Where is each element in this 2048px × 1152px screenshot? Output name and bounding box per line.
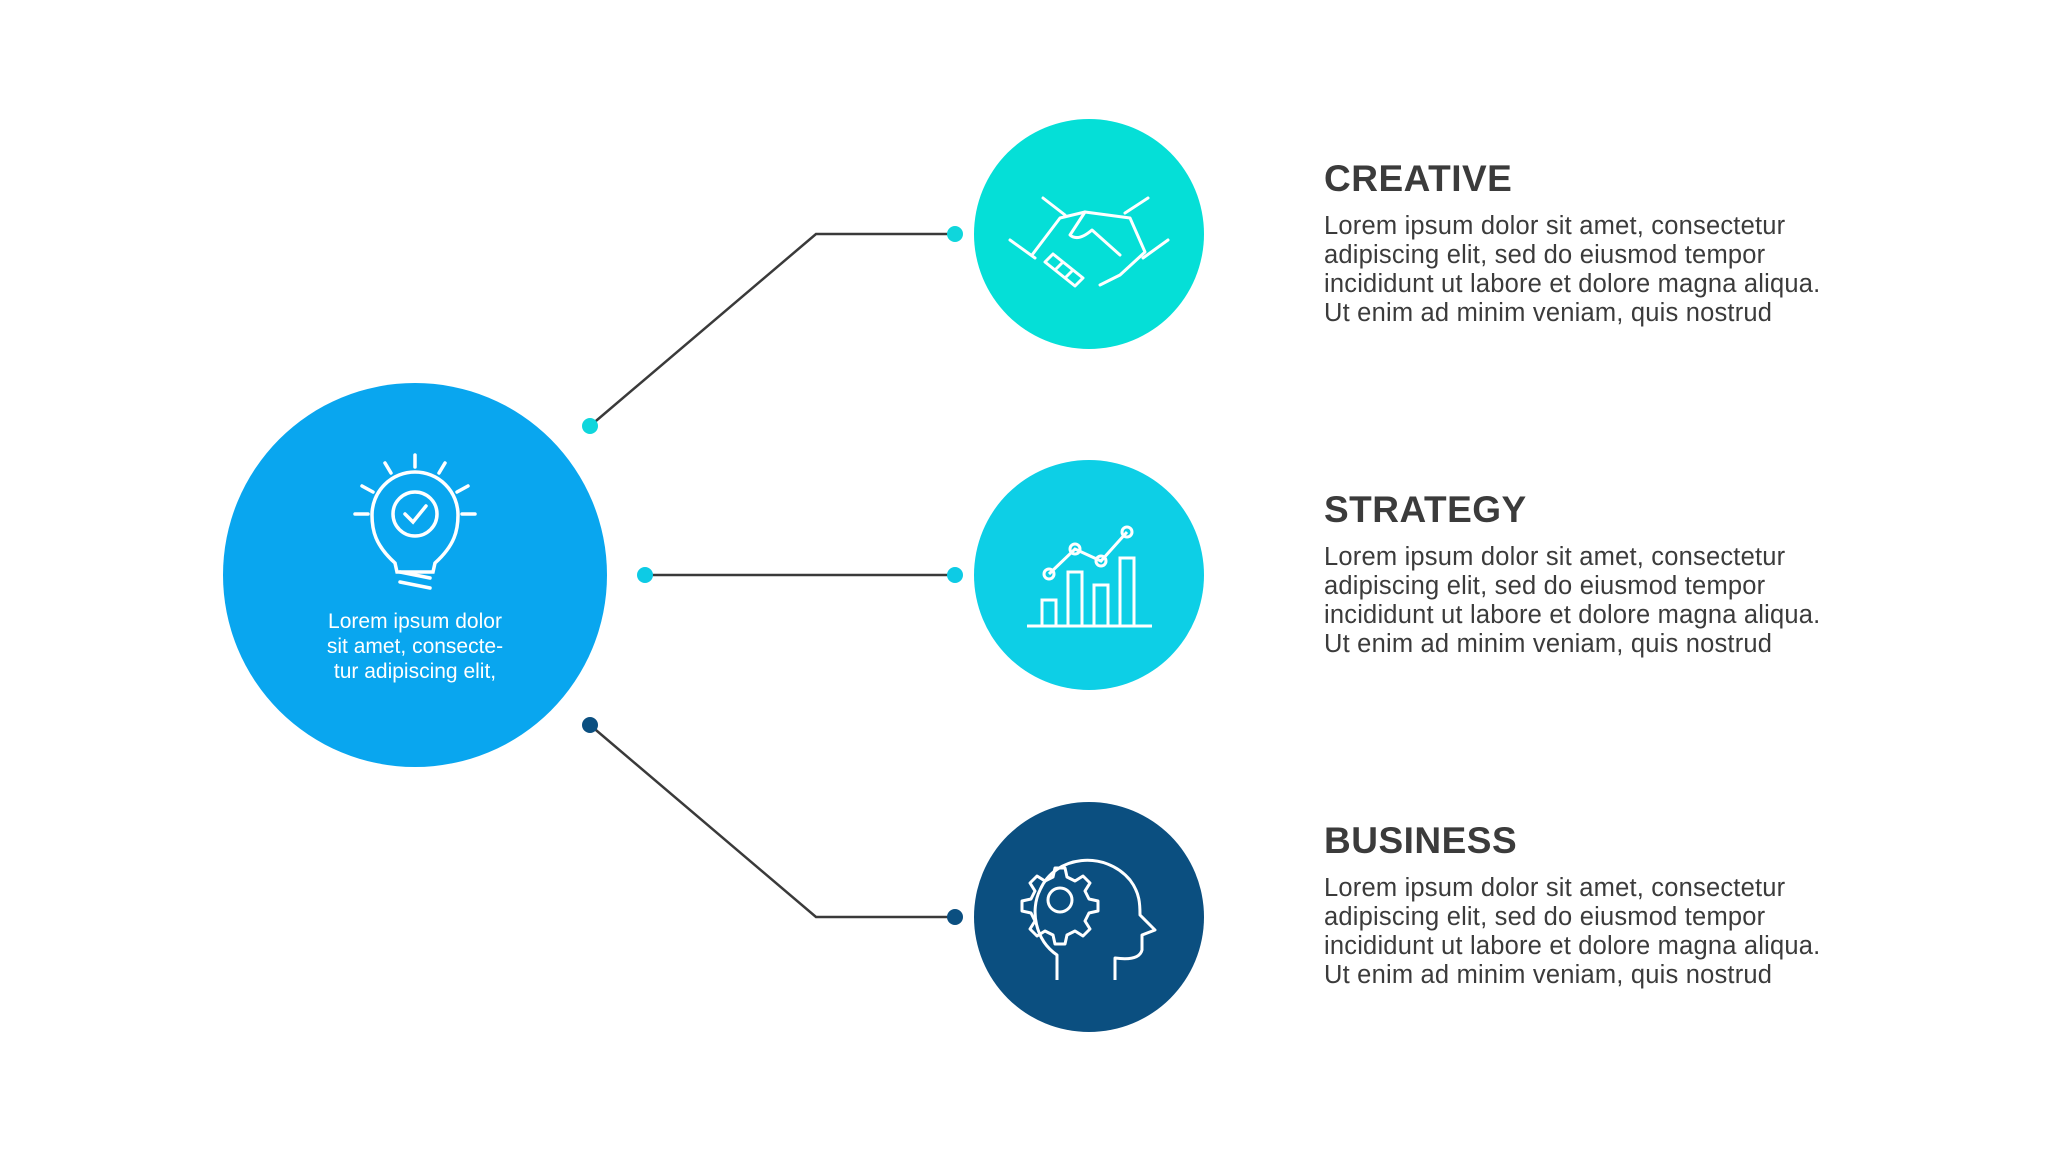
connector: strategy bbox=[637, 567, 963, 583]
icon: lightbulb bbox=[355, 455, 475, 588]
text block: strategy: STRATEGY bbox=[1324, 489, 1527, 530]
text block: creative: adipiscing elit, sed do eiusmod tempor bbox=[1324, 241, 1765, 269]
text block: business: Lorem ipsum dolor sit amet, consectetur bbox=[1324, 874, 1785, 902]
circle: business (head with gear) bbox=[974, 802, 1204, 1032]
text block: business: adipiscing elit, sed do eiusmod tempor bbox=[1324, 903, 1765, 931]
text block: strategy: incididunt ut labore et dolore magna aliqua. bbox=[1324, 601, 1820, 629]
text block: business: BUSINESS bbox=[1324, 820, 1517, 861]
text block: strategy: Lorem ipsum dolor sit amet, consectetur bbox=[1324, 543, 1785, 571]
text block: business: incididunt ut labore et dolore magna aliqua. bbox=[1324, 932, 1820, 960]
text block: creative: Lorem ipsum dolor sit amet, consectetur bbox=[1324, 212, 1785, 240]
main circle text: sit amet, consecte- bbox=[327, 635, 503, 658]
main circle text: Lorem ipsum dolor bbox=[328, 610, 502, 633]
main circle text: tur adipiscing elit, bbox=[334, 660, 496, 683]
text block: business bbox=[1324, 820, 1820, 989]
text block: creative: incididunt ut labore et dolore magna aliqua. bbox=[1324, 270, 1820, 298]
connector: business bbox=[582, 717, 963, 925]
text block: strategy bbox=[1324, 489, 1820, 658]
text block: business: Ut enim ad minim veniam, quis nostrud bbox=[1324, 961, 1772, 989]
text block: strategy: adipiscing elit, sed do eiusmod tempor bbox=[1324, 572, 1765, 600]
circle: strategy (chart) bbox=[974, 460, 1204, 690]
text block: strategy: Ut enim ad minim veniam, quis nostrud bbox=[1324, 630, 1772, 658]
text block: creative: CREATIVE bbox=[1324, 158, 1512, 199]
connector: creative bbox=[582, 226, 963, 434]
main circle bbox=[223, 383, 607, 767]
text block: creative bbox=[1324, 158, 1820, 327]
text block: creative: Ut enim ad minim veniam, quis nostrud bbox=[1324, 299, 1772, 327]
circle: creative (handshake) bbox=[974, 119, 1204, 349]
